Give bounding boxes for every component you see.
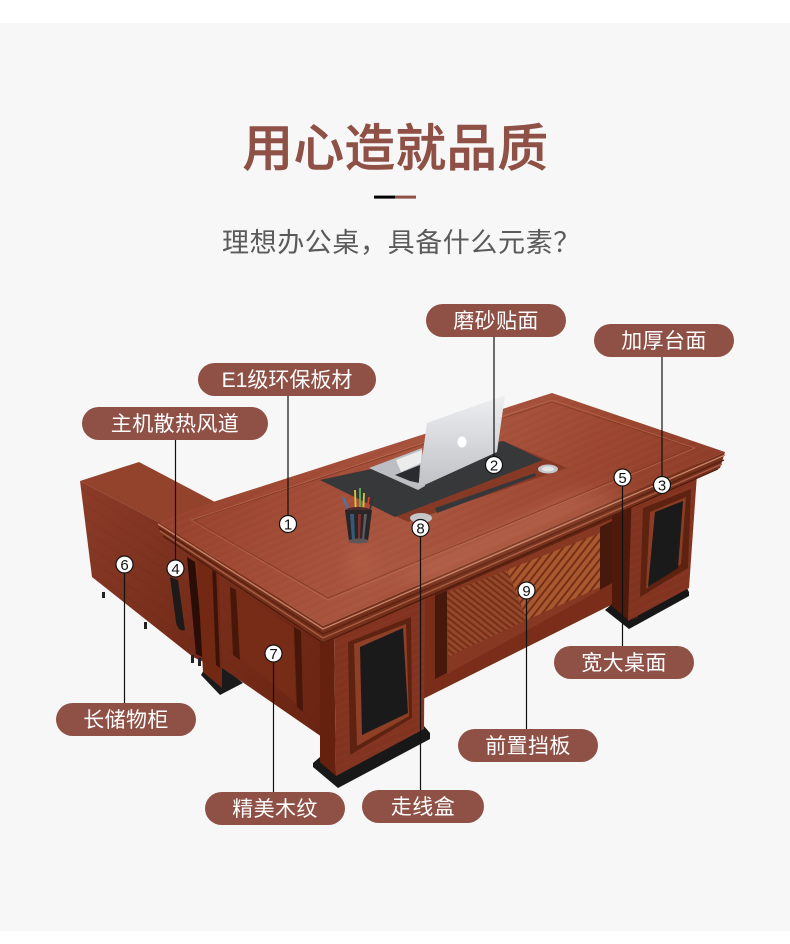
laptop: [369, 395, 505, 490]
left side panel: [218, 555, 325, 737]
callout 8: 走线盒: [362, 520, 484, 823]
callout 7: 精美木纹: 7: [269, 646, 278, 663]
right pedestal: [605, 460, 698, 629]
pen cup: [343, 488, 375, 578]
callout 8: 走线盒: 8: [416, 520, 425, 538]
callout 6: 长储物柜: [56, 556, 196, 736]
callout 2: 磨砂贴面: 磨砂贴面: [453, 310, 539, 333]
callout 9: 前置挡板: 前置挡板: [485, 735, 571, 758]
black inset: [360, 628, 408, 735]
callout 6: 长储物柜: 长储物柜: [83, 709, 169, 732]
cable slot: [435, 473, 536, 513]
callout 5: 宽大桌面: 5: [618, 470, 627, 487]
herringbone veneer: [447, 533, 600, 657]
desk mat: [320, 441, 567, 522]
side storage cabinet: [80, 462, 215, 666]
callout 9: 前置挡板: [458, 582, 598, 762]
callout 3: 加厚台面: 加厚台面: [621, 330, 707, 353]
callout 9: 前置挡板: 9: [522, 583, 531, 600]
callout 2: 磨砂贴面: [426, 304, 566, 474]
callout 8: 走线盒: 走线盒: [391, 796, 455, 819]
callout 5: 宽大桌面: [554, 469, 694, 679]
title divider: [374, 196, 416, 199]
heat vent: [170, 577, 185, 630]
front modesty panel: [423, 490, 640, 699]
subtitle: 理想办公桌，具备什么元素？: [222, 228, 581, 258]
apple logo: [458, 436, 466, 448]
desk top moulding: [158, 452, 725, 644]
callout 5: 宽大桌面: 宽大桌面: [581, 652, 667, 675]
front leg: [313, 587, 430, 788]
callout 1: E1级环保板材: [198, 363, 376, 534]
rear leg: [196, 545, 243, 695]
callout 6: 长储物柜: 6: [120, 557, 129, 574]
cable grommets: [410, 464, 558, 523]
black inset: [648, 501, 683, 587]
callout 4: 主机散热风道: 主机散热风道: [111, 413, 239, 436]
callout 4: 主机散热风道: [82, 407, 268, 578]
callout 7: 精美木纹: 精美木纹: [232, 798, 318, 821]
callout 7: 精美木纹: [205, 645, 345, 825]
desk top surface: [158, 393, 725, 626]
callout 3: 加厚台面: 3: [658, 478, 666, 494]
callout 2: 磨砂贴面: 2: [490, 458, 498, 474]
callout 3: 加厚台面: [594, 324, 734, 494]
callout 1: E1级环保板材: 1: [284, 516, 292, 534]
callout 1: E1级环保板材: E1级环保板材: [222, 369, 352, 392]
desk illustration: [80, 393, 725, 788]
callout 4: 主机散热风道: 4: [171, 561, 180, 578]
title: 用心造就品质: [242, 120, 548, 177]
